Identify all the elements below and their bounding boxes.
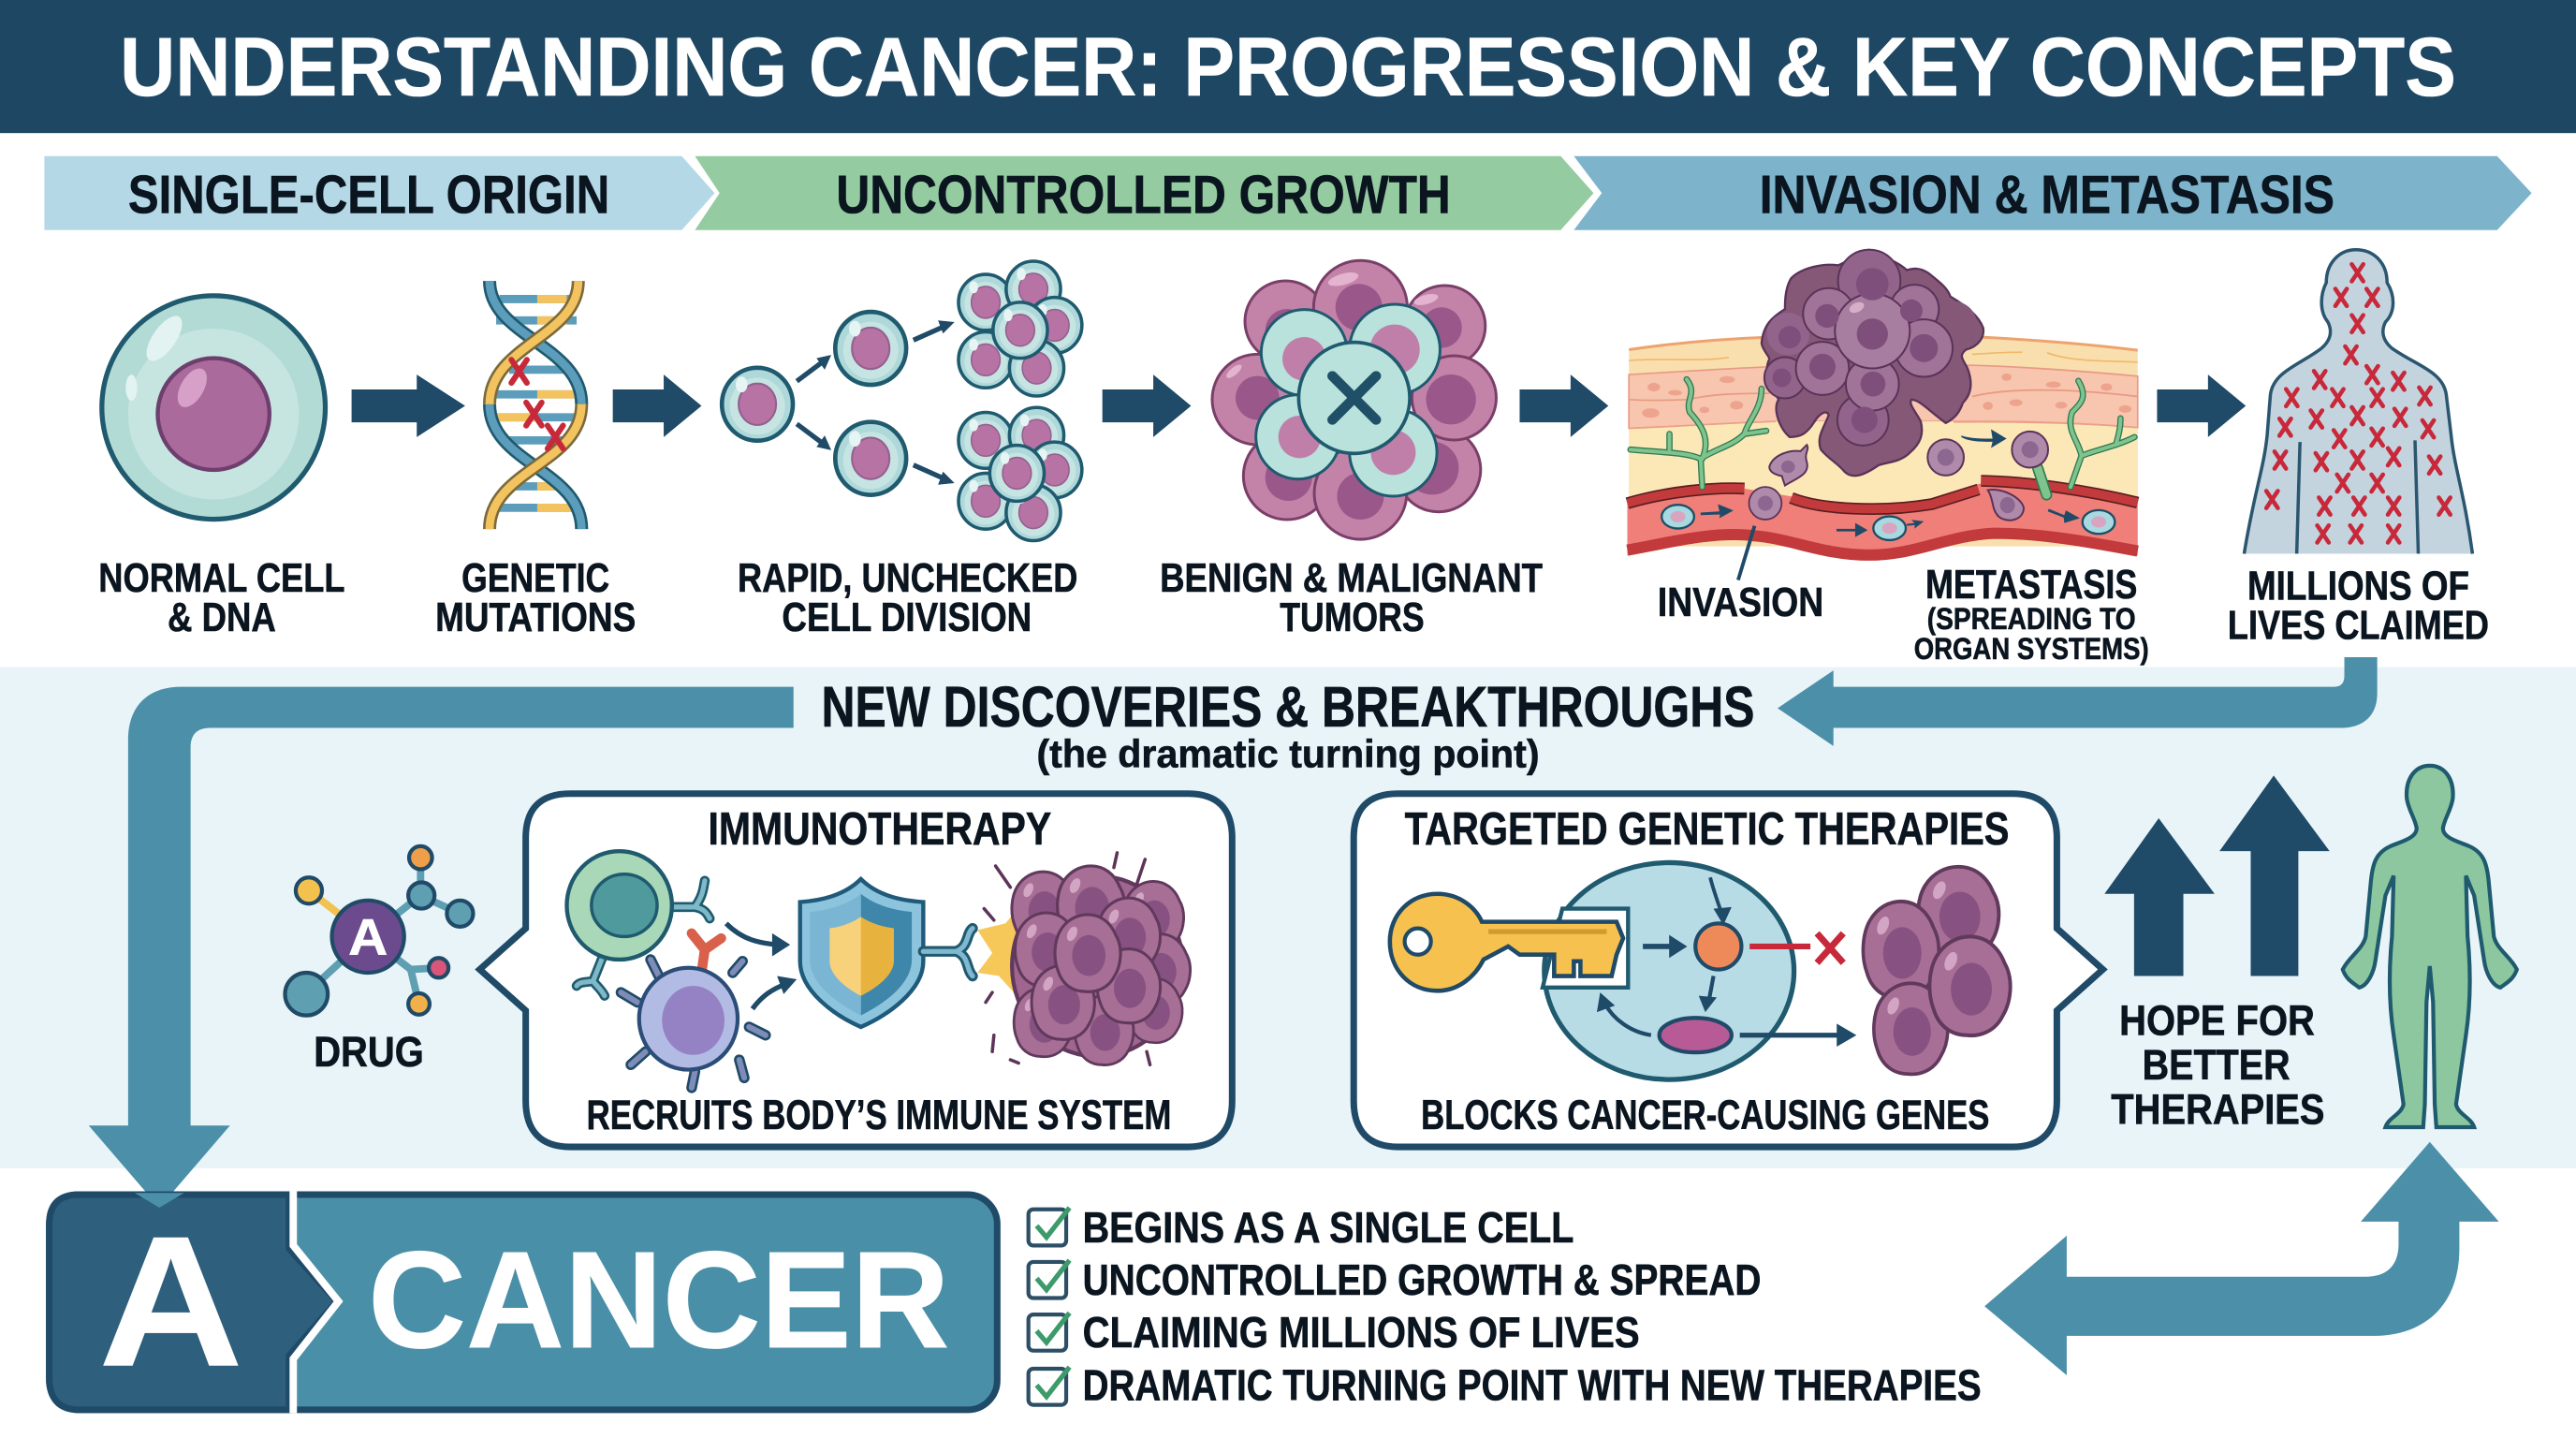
icon: drug molecule: A (348, 909, 388, 966)
leader line: invasion (1738, 526, 1754, 580)
arrows: hope up arrows (2104, 775, 2330, 976)
arrow (352, 374, 465, 437)
label: metastasis (1914, 562, 2149, 666)
word CANCER: CANCER (368, 1224, 949, 1377)
icon: normal cell (102, 296, 326, 520)
big letter A: A (98, 1197, 243, 1405)
panel: discoveries background (0, 668, 2576, 1168)
label: hope for better therapies: THERAPIES (2111, 1085, 2324, 1133)
icon: target cell with pathway (1543, 862, 1856, 1079)
arrow (613, 374, 701, 437)
label: metastasis: (SPREADING TO (1927, 602, 2136, 636)
title banner (0, 0, 2576, 133)
panel caption: BLOCKS CANCER-CAUSING GENES (1421, 1092, 1989, 1138)
heading: new discoveries: NEW DISCOVERIES & BREAKTHROUGHS (822, 675, 1754, 740)
icon: body with metastases (2244, 250, 2472, 553)
icon: tissue cross-section with invasion and metastasis (1628, 250, 2138, 559)
label: normal cell (98, 555, 345, 640)
stage banner: single-cell origin: SINGLE-CELL ORIGIN (128, 165, 609, 225)
icon: drug molecule (285, 846, 473, 1016)
escaping and circulating cells (1661, 430, 2115, 540)
label: metastasis: METASTASIS (1925, 562, 2137, 608)
stage banner: uncontrolled growth: UNCONTROLLED GROWTH (836, 165, 1451, 225)
label: genetic mutations: GENETIC (461, 555, 609, 601)
icon: shield (800, 879, 923, 1027)
panel title: TARGETED GENETIC THERAPIES (1405, 804, 2009, 855)
box: dark A segment (50, 1195, 337, 1410)
label: normal cell: NORMAL CELL (98, 555, 345, 601)
label: hope for better therapies: HOPE FOR (2119, 997, 2315, 1045)
label: genetic mutations (435, 555, 636, 640)
label: rapid cell division: CELL DIVISION (782, 594, 1032, 640)
label: benign and malignant tumors (1160, 555, 1543, 640)
label: benign and malignant tumors: TUMORS (1280, 594, 1425, 640)
label: rapid cell division: RAPID, UNCHECKED (738, 555, 1077, 601)
arrow: from discoveries down to cancer box (89, 687, 794, 1208)
item: uncontrolled growth and spread: UNCONTROLLED GROWTH & SPREAD (1083, 1255, 1761, 1304)
item: begins as a single cell: BEGINS AS A SINGLE CELL (1083, 1203, 1573, 1252)
icon: healthy person (2343, 766, 2517, 1127)
label: hope for better therapies (2111, 997, 2324, 1133)
icon: key (1390, 894, 1623, 990)
panel: targeted genetic therapies (1354, 794, 2103, 1147)
label: drug: DRUG (314, 1028, 424, 1076)
item: claiming millions of lives: CLAIMING MILLIONS OF LIVES (1083, 1308, 1640, 1357)
subheading: turning point: (the dramatic turning point) (1036, 733, 1540, 776)
icon: cell division tree (722, 261, 1082, 540)
icon: NK cell (621, 933, 766, 1088)
label: benign and malignant tumors: BENIGN & MALIGNANT (1160, 555, 1543, 601)
label: millions of lives claimed: LIVES CLAIMED (2228, 603, 2489, 649)
icon: tumor under attack (984, 853, 1191, 1065)
panel caption: RECRUITS BODY’S IMMUNE SYSTEM (587, 1092, 1171, 1138)
icon: T cell (567, 851, 710, 996)
label: rapid cell division (738, 555, 1077, 640)
stage banner: uncontrolled growth (695, 156, 1593, 230)
panel title: IMMUNOTHERAPY (708, 804, 1051, 855)
item: dramatic turning point: DRAMATIC TURNING POINT WITH NEW THERAPIES (1083, 1360, 1982, 1409)
label: invasion: INVASION (1658, 580, 1823, 625)
stage banner: single-cell origin (44, 156, 714, 230)
label: millions of lives claimed (2228, 564, 2489, 649)
cancer name box (50, 1191, 997, 1413)
arrow (1519, 374, 1608, 437)
stage banner: invasion and metastasis: INVASION & METASTASIS (1760, 165, 2334, 225)
arrow tip over box (135, 1193, 184, 1208)
arrow (1103, 374, 1191, 437)
label: millions of lives claimed: MILLIONS OF (2247, 564, 2469, 609)
arrow: from lives claimed into discoveries (1778, 657, 2378, 746)
arrows into shield (726, 923, 797, 1009)
arrow (2157, 374, 2246, 437)
label: genetic mutations: MUTATIONS (435, 594, 636, 640)
label: metastasis: ORGAN SYSTEMS) (1914, 632, 2149, 666)
panel: immunotherapy (479, 794, 1232, 1147)
tumor mass (1762, 250, 1983, 476)
arrow: hope cycle (1984, 1142, 2499, 1375)
checklist (1029, 1203, 1982, 1409)
label: hope for better therapies: BETTER (2143, 1041, 2291, 1089)
icon: cancer cells (1863, 867, 2011, 1074)
icon: receptor and burst (923, 903, 1022, 994)
stage banner: invasion and metastasis (1573, 156, 2532, 230)
icon: DNA with mutations (490, 281, 581, 529)
icon: benign and malignant tumor (1212, 260, 1496, 539)
label: normal cell: & DNA (168, 594, 276, 640)
